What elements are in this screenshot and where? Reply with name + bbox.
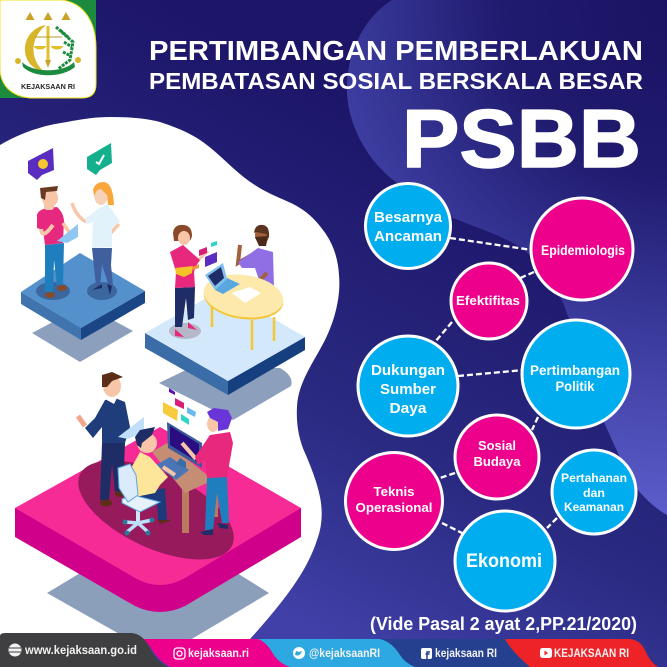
node: Besarnya Ancaman xyxy=(366,184,450,268)
node: Pertahanan dan Keamanan xyxy=(552,450,636,534)
node: Pertahanan dan Keamanan: Pertahanan xyxy=(561,473,627,485)
platform xyxy=(145,289,305,395)
standing man xyxy=(78,372,144,506)
node: Pertahanan dan Keamanan: Keamanan xyxy=(564,502,624,514)
node: Dukungan Sumber Daya: Daya xyxy=(390,400,427,417)
icon: globe xyxy=(8,644,22,656)
node: Pertimbangan Politik: Politik xyxy=(556,379,595,394)
logo panel xyxy=(0,0,96,98)
node: Efektifitas xyxy=(451,263,527,339)
colored cards xyxy=(163,388,196,425)
white blob panel xyxy=(0,117,339,639)
node: Teknis Operasional: Operasional xyxy=(356,500,432,515)
title: PSBB xyxy=(402,92,641,185)
icon: three stars xyxy=(26,12,70,20)
man with tablet xyxy=(37,186,78,298)
node: Dukungan Sumber Daya xyxy=(358,336,458,436)
node: Dukungan Sumber Daya: Sumber xyxy=(380,381,436,398)
icon: check bubble xyxy=(87,143,112,175)
node: Sosial Budaya xyxy=(455,415,539,499)
facebook text: kejaksaan RI xyxy=(435,648,497,660)
bearded man xyxy=(238,225,274,290)
legal reference: (Vide Pasal 2 ayat 2,PP.21/2020) xyxy=(370,614,637,634)
title: PERTIMBANGAN PEMBERLAKUAN xyxy=(149,35,643,66)
dashed connectors xyxy=(435,238,557,533)
node: Besarnya Ancaman: Besarnya xyxy=(374,209,443,226)
youtube text: KEJAKSAAN RI xyxy=(554,648,629,660)
seated man on chair xyxy=(118,427,175,536)
node: Pertahanan dan Keamanan: dan xyxy=(583,488,605,500)
instagram text: kejaksaan.ri xyxy=(188,648,249,660)
woman in white coat xyxy=(72,182,120,295)
node: Pertimbangan Politik: Pertimbangan xyxy=(530,363,620,378)
node: Sosial Budaya: Budaya xyxy=(474,454,521,469)
platform shadow xyxy=(32,305,133,362)
icon: youtube xyxy=(540,648,552,658)
table with laptop xyxy=(201,263,286,350)
purple-haired man xyxy=(182,408,233,535)
platform 3 with office team xyxy=(15,372,301,640)
node: Pertimbangan Politik xyxy=(522,320,630,428)
icon: facebook xyxy=(421,648,432,659)
logo label: KEJAKSAAN RI xyxy=(21,84,75,91)
footer bar xyxy=(0,633,658,667)
title xyxy=(149,35,643,185)
platform xyxy=(15,427,301,612)
node: Efektifitas: Efektifitas xyxy=(456,293,520,308)
twitter text: @kejaksaanRI xyxy=(309,648,380,660)
woman with cards xyxy=(170,225,217,337)
node: Dukungan Sumber Daya: Dukungan xyxy=(371,362,445,379)
platform 2 with two people and table xyxy=(145,225,305,420)
icon: twitter xyxy=(293,647,305,659)
title: PEMBATASAN SOSIAL BERSKALA BESAR xyxy=(149,68,643,94)
platform shadow xyxy=(47,525,269,640)
node: Teknis Operasional: Teknis xyxy=(374,484,414,499)
node: Epidemiologis xyxy=(531,198,633,300)
desk with monitor xyxy=(152,422,218,533)
platform shadow xyxy=(159,368,292,420)
website text: www.kejaksaan.go.id xyxy=(24,645,137,657)
platform 1 with two people xyxy=(21,143,145,362)
icon: smile bubble xyxy=(28,148,54,180)
node: Epidemiologis: Epidemiologis xyxy=(541,243,625,258)
icon: emblem xyxy=(15,25,81,75)
node: Teknis Operasional xyxy=(346,452,442,550)
node: Ekonomi: Ekonomi xyxy=(466,551,542,572)
platform xyxy=(21,253,145,340)
node: Besarnya Ancaman: Ancaman xyxy=(374,228,442,245)
icon: instagram xyxy=(174,648,185,659)
node: Ekonomi xyxy=(455,511,555,611)
node: Sosial Budaya: Sosial xyxy=(478,438,516,453)
